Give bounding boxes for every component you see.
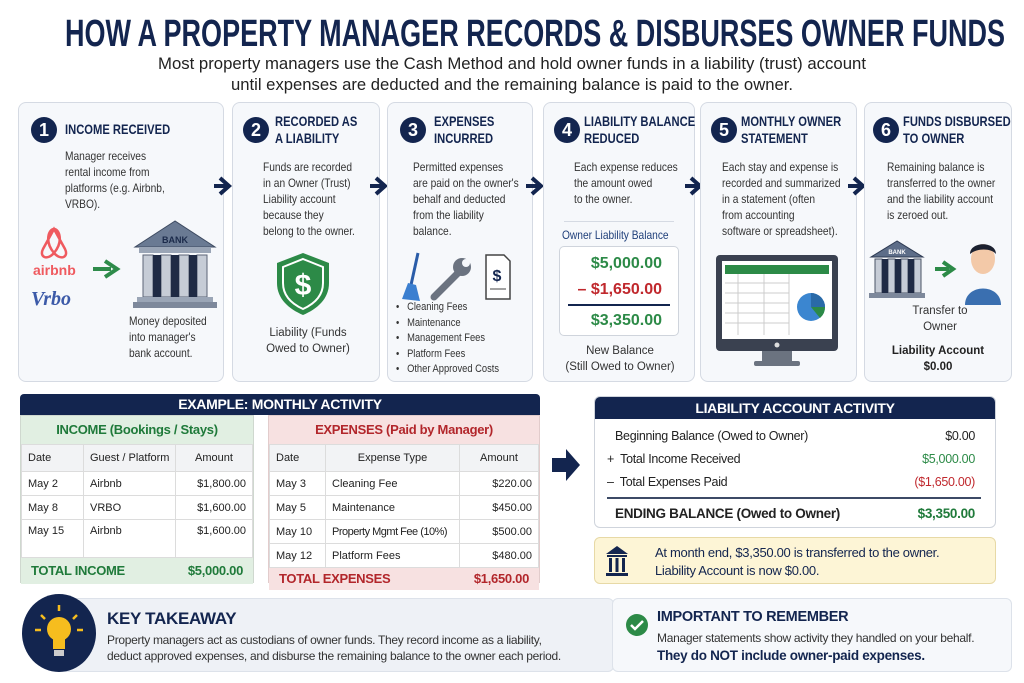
panel: liability account activity: – Total Expenses Paid [607, 475, 727, 489]
arrow: green [93, 259, 120, 279]
icon: bank to person [869, 240, 1001, 305]
icon: broom wrench invoice: $ [493, 268, 502, 285]
panel: step 5 monthly owner statement: 5 [719, 120, 729, 140]
panel: example monthly activity [20, 394, 540, 590]
panel: step 5 monthly owner statement: software or spreadsheet). [722, 224, 838, 238]
panel: step 6 funds disbursed: Liability Account [892, 345, 984, 357]
panel: step 2 recorded as liability: Liability account [263, 192, 336, 206]
panel: step 5 monthly owner statement: in a statement (often [722, 192, 815, 206]
panel: step 6 funds disbursed: is zeroed out. [887, 208, 948, 222]
panel: step 4 liability balance reduced: 4 [562, 120, 572, 140]
panel: liability account activity: Beginning Balance (Owed to Owner) [615, 429, 808, 443]
panel: step 2 recorded as liability: A LIABILITY [275, 130, 339, 146]
table: expenses: Expense Type [358, 452, 427, 464]
panel: step 5 monthly owner statement: MONTHLY OWNER [741, 113, 841, 129]
arrow: 2 to 3 [370, 176, 387, 196]
table: expenses: May 10 [276, 526, 312, 538]
panel: step 6 funds disbursed: Remaining balance is [887, 160, 985, 174]
table: expenses: May 12 [276, 550, 312, 562]
icon: monitor with spreadsheet [716, 255, 838, 366]
panel: step 2 recorded as liability: RECORDED AS [275, 113, 357, 129]
panel: step 4 liability balance reduced: REDUCED [584, 130, 639, 146]
panel: step 6 funds disbursed: and the liability account [887, 192, 993, 206]
panel: step 6 funds disbursed [864, 102, 1012, 382]
panel: step 1 income received: 1 [39, 120, 49, 140]
panel: step 2 recorded as liability: in an Owner (Trust) [263, 176, 350, 190]
arrow: 3 to 4 [526, 176, 543, 196]
panel: step 6 funds disbursed: FUNDS DISBURSED [903, 113, 1011, 129]
chart: balance calculation box [559, 246, 679, 336]
table: expenses: Date [276, 452, 299, 464]
panel: key takeaway: deduct approved expenses, and disburse the remaining balance to the owner each period. [107, 649, 561, 663]
panel: liability account activity: $5,000.00 [922, 452, 975, 466]
table: income: Airbnb [90, 478, 122, 490]
chart: balance calculation box: – $1,650.00 [577, 281, 662, 298]
icon: small bank [606, 546, 628, 576]
table: expenses: Maintenance [332, 502, 395, 514]
table: income: $1,600.00 [197, 525, 246, 537]
panel: step 4 liability balance reduced: New Balance [586, 345, 654, 357]
panel: step 2 recorded as liability: belong to the owner. [263, 224, 355, 238]
panel: step 4 liability balance reduced [543, 102, 695, 382]
table: income: $1,800.00 [197, 478, 246, 490]
panel: step 4 liability balance reduced: Each expense reduces [574, 160, 678, 174]
icon: airbnb and vrbo logos [31, 226, 76, 310]
table: income: INCOME (Bookings / Stays) [56, 422, 218, 437]
icon: shield dollar [277, 253, 329, 315]
panel: important to remember: IMPORTANT TO REMEMBER [657, 609, 848, 625]
icon: broom wrench invoice [402, 252, 511, 301]
table: income: May 15 [28, 525, 64, 537]
icon: airbnb and vrbo logos: Vrbo [31, 288, 71, 310]
icon: check [626, 614, 648, 636]
arrow: to liability activity [552, 449, 580, 481]
panel: step 6 funds disbursed: 6 [881, 120, 891, 140]
panel: step 1 income received: platforms (e.g. Airbnb, [65, 181, 165, 195]
panel: step 1 income received: bank account. [129, 346, 193, 360]
table: expenses: $220.00 [492, 478, 532, 490]
icon: bank [133, 220, 217, 308]
title: Most property managers use the Cash Method and hold owner funds in a liability (trust) account [158, 55, 866, 73]
panel: step 3 expenses incurred: 3 [408, 120, 418, 140]
table: expenses: $450.00 [492, 502, 532, 514]
panel: step 6 funds disbursed: TO OWNER [903, 130, 964, 146]
panel: step 6 funds disbursed: $0.00 [924, 361, 952, 373]
panel: step 2 recorded as liability: Liability (Funds [269, 327, 347, 339]
panel: liability account activity: + Total Income Received [607, 452, 740, 466]
heading: example monthly activity: EXAMPLE: MONTHLY ACTIVITY [178, 396, 382, 412]
table: expenses [268, 415, 540, 583]
table: expenses: EXPENSES (Paid by Manager) [315, 422, 493, 437]
panel: step 6 funds disbursed: Transfer to [912, 305, 968, 317]
callout: month end transfer [594, 537, 996, 584]
table: income: May 8 [28, 502, 58, 514]
panel: step 3 expenses incurred: • Platform Fees [396, 348, 465, 360]
table: expenses: $480.00 [492, 550, 532, 562]
panel: step 3 expenses incurred: Permitted expenses [413, 160, 503, 174]
panel: key takeaway: Property managers act as custodians of owner funds. They record income as a liability, [107, 633, 542, 647]
icon: lightbulb [22, 594, 96, 672]
panel: step 3 expenses incurred: are paid on the owner's [413, 176, 519, 190]
table: income [20, 415, 254, 583]
panel: step 3 expenses incurred: INCURRED [434, 130, 493, 146]
panel: step 4 liability balance reduced: the amount owed [574, 176, 652, 190]
panel: step 4 liability balance reduced: to the owner. [574, 192, 632, 206]
callout: month end transfer: Liability Account is now $0.00. [655, 563, 819, 578]
table: income: Date [28, 452, 51, 464]
panel: step 6 funds disbursed: Owner [923, 321, 957, 333]
panel: step 2 recorded as liability: 2 [251, 120, 261, 140]
panel: step 2 recorded as liability: Funds are recorded [263, 160, 352, 174]
chart: balance calculation box: $3,350.00 [591, 312, 662, 329]
table: expenses: May 5 [276, 502, 306, 514]
title [65, 13, 1005, 94]
panel: step 1 income received: Money deposited [129, 314, 207, 328]
table: income: Amount [195, 452, 233, 464]
panel: key takeaway [60, 598, 614, 672]
table: income: $5,000.00 [188, 563, 243, 578]
panel: step 3 expenses incurred [387, 102, 533, 382]
chart: balance calculation box: $5,000.00 [591, 255, 662, 272]
panel: step 2 recorded as liability [232, 102, 380, 382]
panel: important to remember: They do NOT include owner-paid expenses. [657, 648, 925, 663]
panel: step 3 expenses incurred: EXPENSES [434, 113, 494, 129]
title: until expenses are deducted and the remaining balance is paid to the owner. [231, 76, 793, 94]
panel: step 6 funds disbursed: transferred to the owner [887, 176, 995, 190]
panel: step 4 liability balance reduced: LIABILITY BALANCE [584, 113, 695, 129]
icon: bank to person: BANK [888, 250, 906, 256]
panel: liability account activity: $0.00 [945, 429, 975, 443]
arrow: 1 to 2 [214, 176, 232, 196]
panel: step 5 monthly owner statement [700, 102, 857, 382]
panel: step 3 expenses incurred: • Maintenance [396, 316, 461, 328]
icon: airbnb and vrbo logos: airbnb [33, 262, 76, 278]
callout: month end transfer: At month end, $3,350.00 is transferred to the owner. [655, 545, 939, 560]
panel: step 1 income received: rental income from [65, 165, 149, 179]
arrow: 4 to 5 [685, 176, 700, 196]
table: expenses: $1,650.00 [474, 571, 529, 586]
panel: step 2 recorded as liability: because they [263, 208, 324, 222]
panel: liability account activity: ENDING BALANCE (Owed to Owner) [615, 506, 840, 521]
table: income: VRBO [90, 502, 121, 514]
table: income: Guest / Platform [90, 452, 169, 464]
panel: step 3 expenses incurred: from the liability [413, 208, 484, 222]
panel: liability account activity [594, 396, 996, 528]
panel: liability account activity: ($1,650.00) [914, 475, 975, 489]
table: income: $1,600.00 [197, 502, 246, 514]
table: expenses: $500.00 [492, 526, 532, 538]
table: expenses: Amount [480, 452, 518, 464]
table: expenses: Cleaning Fee [332, 478, 397, 490]
table: expenses: Platform Fees [332, 550, 400, 562]
panel: step 5 monthly owner statement: Each stay and expense is [722, 160, 838, 174]
panel: step 3 expenses incurred: balance. [413, 224, 452, 238]
panel: step 3 expenses incurred: • Other Approved Costs [396, 363, 499, 375]
table: expenses: May 3 [276, 478, 306, 490]
panel: step 4 liability balance reduced: Owner Liability Balance [562, 228, 669, 242]
icon: shield dollar: $ [295, 269, 312, 302]
panel: step 3 expenses incurred: • Management Fees [396, 332, 485, 344]
table: income: May 2 [28, 478, 58, 490]
table: expenses: TOTAL EXPENSES [279, 571, 390, 586]
table: income: TOTAL INCOME [31, 563, 125, 578]
panel: step 5 monthly owner statement: from accounting [722, 208, 795, 222]
panel: step 4 liability balance reduced: (Still Owed to Owner) [565, 361, 675, 373]
panel: liability account activity: $3,350.00 [918, 506, 975, 521]
icon: bank: BANK [162, 235, 188, 245]
arrow: 5 to 6 [848, 176, 864, 196]
panel: important to remember: Manager statements show activity they handled on your behalf. [657, 631, 974, 645]
panel: step 5 monthly owner statement: STATEMENT [741, 130, 808, 146]
panel: liability account activity: LIABILITY ACCOUNT ACTIVITY [695, 400, 895, 416]
panel: important to remember [612, 598, 1012, 672]
panel: step 1 income received: Manager receives [65, 149, 146, 163]
table: expenses: Property Mgmt Fee (10%) [332, 526, 447, 538]
panel: key takeaway: KEY TAKEAWAY [107, 609, 236, 628]
panel: step 1 income received: INCOME RECEIVED [65, 121, 170, 137]
panel: step 3 expenses incurred: behalf and deducted [413, 192, 505, 206]
panel: step 2 recorded as liability: Owed to Owner) [266, 343, 350, 355]
panel: step 1 income received: into manager's [129, 330, 196, 344]
table: income: Airbnb [90, 525, 122, 537]
panel: step 5 monthly owner statement: recorded and summarized [722, 176, 840, 190]
heading: example monthly activity [20, 394, 540, 415]
panel: step 1 income received [18, 102, 224, 382]
panel: step 1 income received: VRBO). [65, 197, 100, 211]
panel: step 3 expenses incurred: • Cleaning Fees [396, 301, 467, 313]
